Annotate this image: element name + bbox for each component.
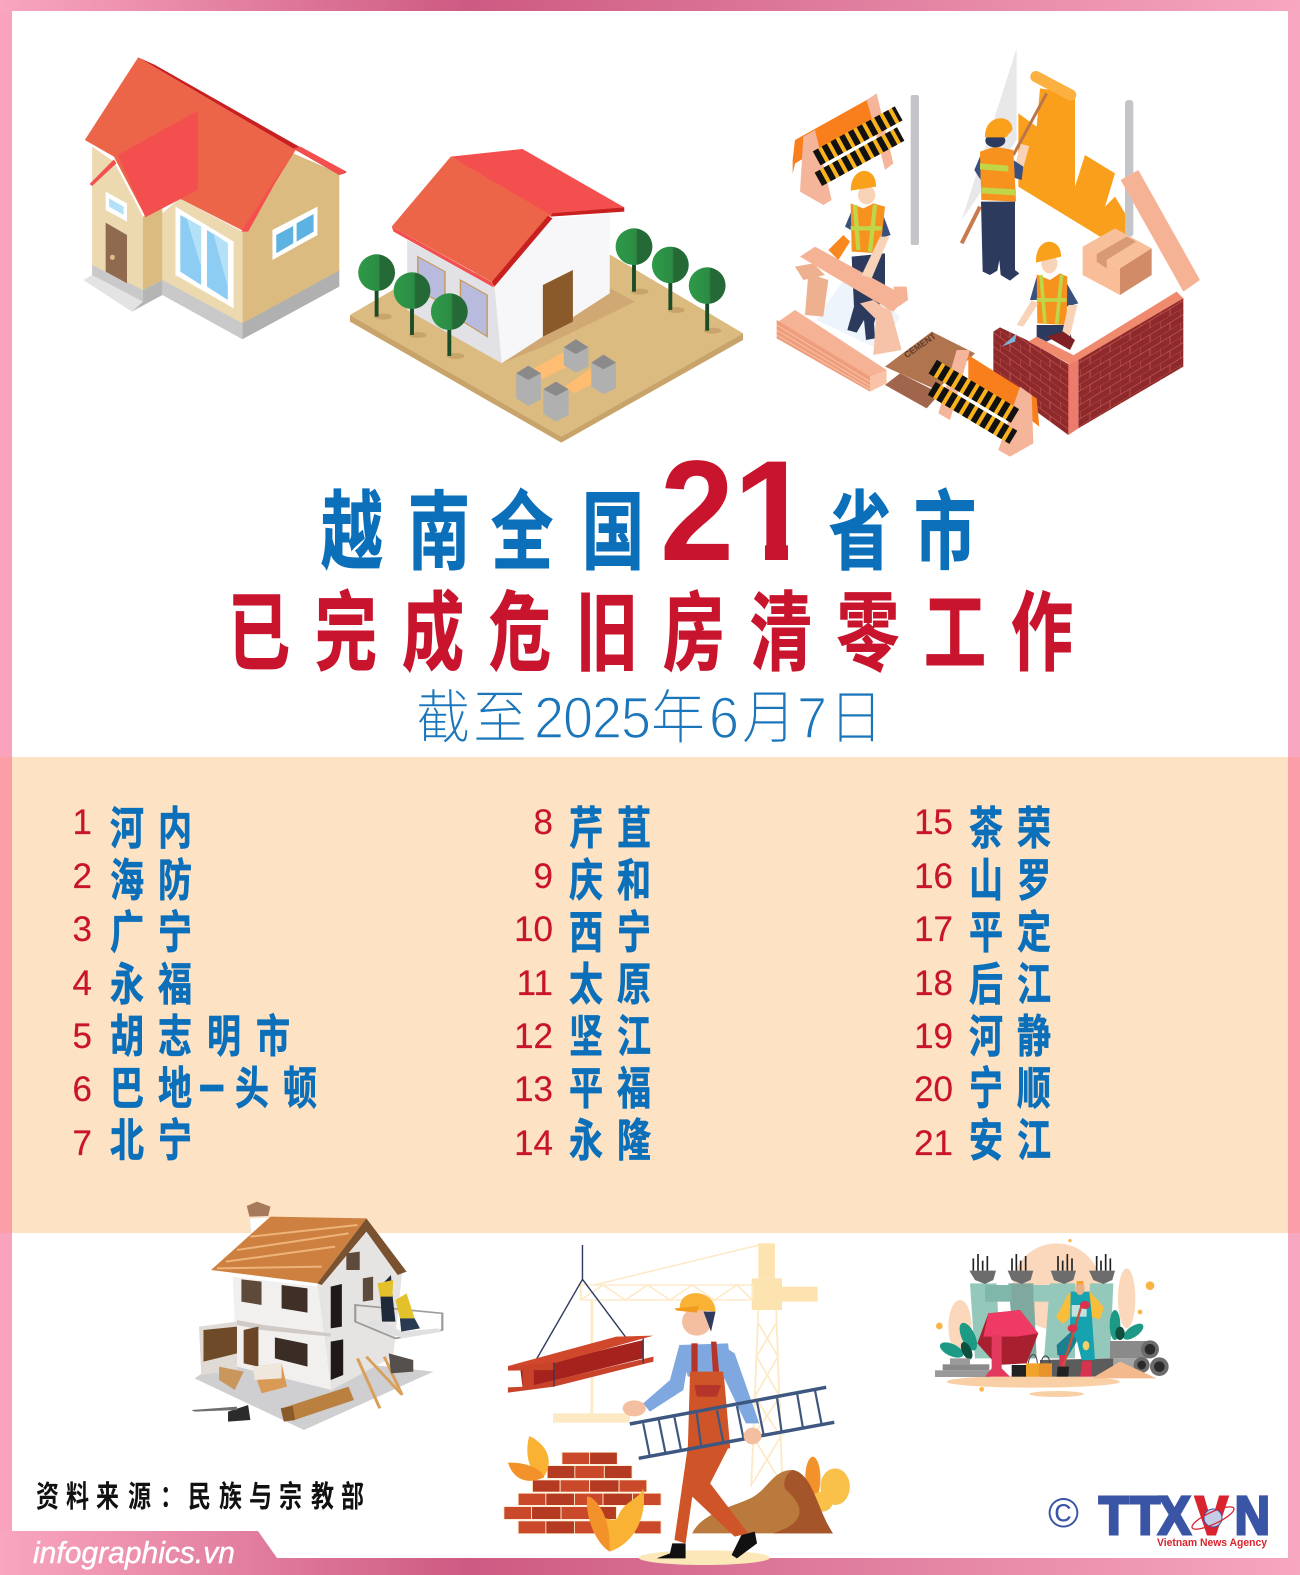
stacked planks (777, 310, 887, 392)
illustration: house under renovation (191, 1202, 442, 1430)
orange paint on wall (1018, 88, 1125, 237)
province list column 1: 4 (73, 964, 92, 1003)
big number 21 (664, 460, 788, 560)
worker carrying ladder (623, 1293, 834, 1565)
angled board (1121, 170, 1200, 292)
subtitle date: 日 (829, 685, 883, 750)
subtitle date: 7 (797, 685, 827, 750)
garden benches (516, 339, 616, 422)
paint roller (1013, 77, 1071, 155)
province list column 2: 13 (514, 1070, 553, 1109)
province list column 3: 15 (914, 803, 953, 842)
illustration: white house on plot with trees (350, 149, 743, 443)
province list column 3: 安江 (969, 1117, 1051, 1166)
stacked pipes (1110, 1340, 1169, 1376)
plants (938, 1310, 1146, 1361)
province list column 3: 21 (914, 1124, 953, 1163)
ladder, logs, debris (191, 1353, 413, 1422)
province list column 1: 海防 (110, 857, 192, 906)
source credit: 资料来源：民族与宗教部 (36, 1480, 364, 1514)
cement bags (885, 330, 975, 408)
cement mixer (977, 1310, 1038, 1377)
province list column 3: 20 (914, 1070, 953, 1109)
province list column 1: – (199, 1050, 225, 1118)
province list column 1: 1 (73, 803, 92, 842)
big number 21: 1 (733, 432, 813, 591)
wordmark: V (1195, 1485, 1228, 1546)
illustration: construction workers scene (777, 48, 1200, 457)
title (233, 460, 1072, 673)
province list column 1: 2 (73, 857, 92, 896)
province list column 2: 14 (514, 1124, 553, 1163)
province list column 2: 太原 (569, 961, 651, 1010)
website label: infographics.vn (33, 1535, 235, 1570)
province list column 1: 胡志明市 (110, 1013, 290, 1062)
grey blocks and base (935, 1358, 1113, 1377)
worker with shovel (1056, 1281, 1104, 1377)
province list column 2: 12 (514, 1017, 553, 1056)
province list column 1: 头顿 (235, 1065, 317, 1114)
subtitle date: 月 (742, 685, 796, 750)
province list column 2: 9 (534, 857, 553, 896)
dirt mound with leaves (692, 1457, 850, 1533)
big number 21: 2 (660, 432, 734, 591)
province list column 3 (914, 803, 1051, 1166)
province list column 2: 11 (517, 964, 553, 1003)
steel beam on cables (508, 1245, 653, 1393)
province list column 2: 西宁 (569, 909, 651, 958)
wordmark: TTX (1099, 1485, 1191, 1546)
bricklayer worker (1002, 242, 1078, 350)
illustration: concrete columns, mixer and worker (935, 1239, 1169, 1397)
province list column 1: 7 (73, 1124, 92, 1163)
province list column 2: 平福 (569, 1065, 651, 1114)
province list column 1: 6 (73, 1070, 92, 1109)
province list column 3: 后江 (969, 961, 1051, 1010)
province list column 3: 17 (914, 910, 953, 949)
left worker with wood (828, 171, 891, 340)
bottom road barrier (932, 350, 1039, 457)
yellow bags (1026, 1355, 1052, 1377)
copyright mark: © (1048, 1489, 1079, 1536)
painter worker (962, 118, 1025, 281)
agency name: Vietnam News Agency (1157, 1537, 1268, 1549)
crane (553, 1243, 818, 1487)
scaffold and workers (355, 1275, 442, 1338)
province list column 3: 18 (914, 964, 953, 1003)
province list column 3: 平定 (969, 909, 1051, 958)
province list column 1: 3 (73, 910, 92, 949)
peach background blobs (936, 1239, 1154, 1397)
wordmark: N (1235, 1485, 1270, 1546)
cement bags: CEMENT (902, 330, 938, 360)
province list column 3: 茶荣 (969, 805, 1051, 854)
cardboard box (1083, 228, 1152, 295)
province list column 3: 19 (914, 1017, 953, 1056)
province list column 1: 广宁 (110, 909, 192, 958)
sand pile (1092, 1362, 1157, 1378)
title line 1: 越南全国 (321, 484, 644, 580)
trees (358, 228, 726, 359)
province list column 1: 河内 (110, 805, 192, 854)
illustration: beige gabled house (83, 57, 347, 339)
title line 2: 已完成危旧房清零工作 (228, 585, 1073, 681)
province list column 1: 巴地 (110, 1065, 192, 1114)
logo: TTXVN Vietnam News Agency (1048, 1485, 1270, 1549)
panel: peach list background (0, 757, 1300, 1233)
province list column 2: 坚江 (569, 1013, 651, 1062)
province list column 2: 芹苴 (569, 805, 651, 854)
province list column 3: 河静 (969, 1013, 1051, 1062)
brick pile (504, 1452, 661, 1534)
brick wall corner (993, 292, 1183, 435)
province list column 1: 5 (73, 1017, 92, 1056)
province list column 2: 永隆 (569, 1117, 651, 1166)
province list column 3: 山罗 (969, 857, 1051, 906)
top road barrier (793, 93, 901, 205)
province list column 1 (73, 803, 317, 1166)
subtitle date: 年 (651, 685, 705, 750)
province list column 3: 16 (914, 857, 953, 896)
website tab (0, 1531, 277, 1575)
province list column 1: 永福 (110, 961, 192, 1010)
floor patch under sawhorse (817, 277, 900, 350)
concrete columns (969, 1254, 1115, 1358)
leaves (508, 1436, 644, 1552)
illustration: crane, steel beam and worker with ladder (504, 1243, 850, 1565)
subtitle date: 6 (709, 685, 739, 750)
province list column 1: 北宁 (110, 1117, 192, 1166)
subtitle date: 截至 (416, 685, 527, 750)
province list column 2: 8 (534, 803, 553, 842)
province list column 2 (514, 803, 651, 1166)
province list column 2: 庆和 (569, 857, 651, 906)
province list column 2: 10 (514, 910, 553, 949)
sawhorse with plank (795, 237, 908, 355)
subtitle date: 2025 (534, 685, 651, 750)
title line 1 end: 省市 (829, 484, 976, 580)
province list column 3: 宁顺 (969, 1065, 1051, 1114)
globe (1204, 1509, 1222, 1527)
